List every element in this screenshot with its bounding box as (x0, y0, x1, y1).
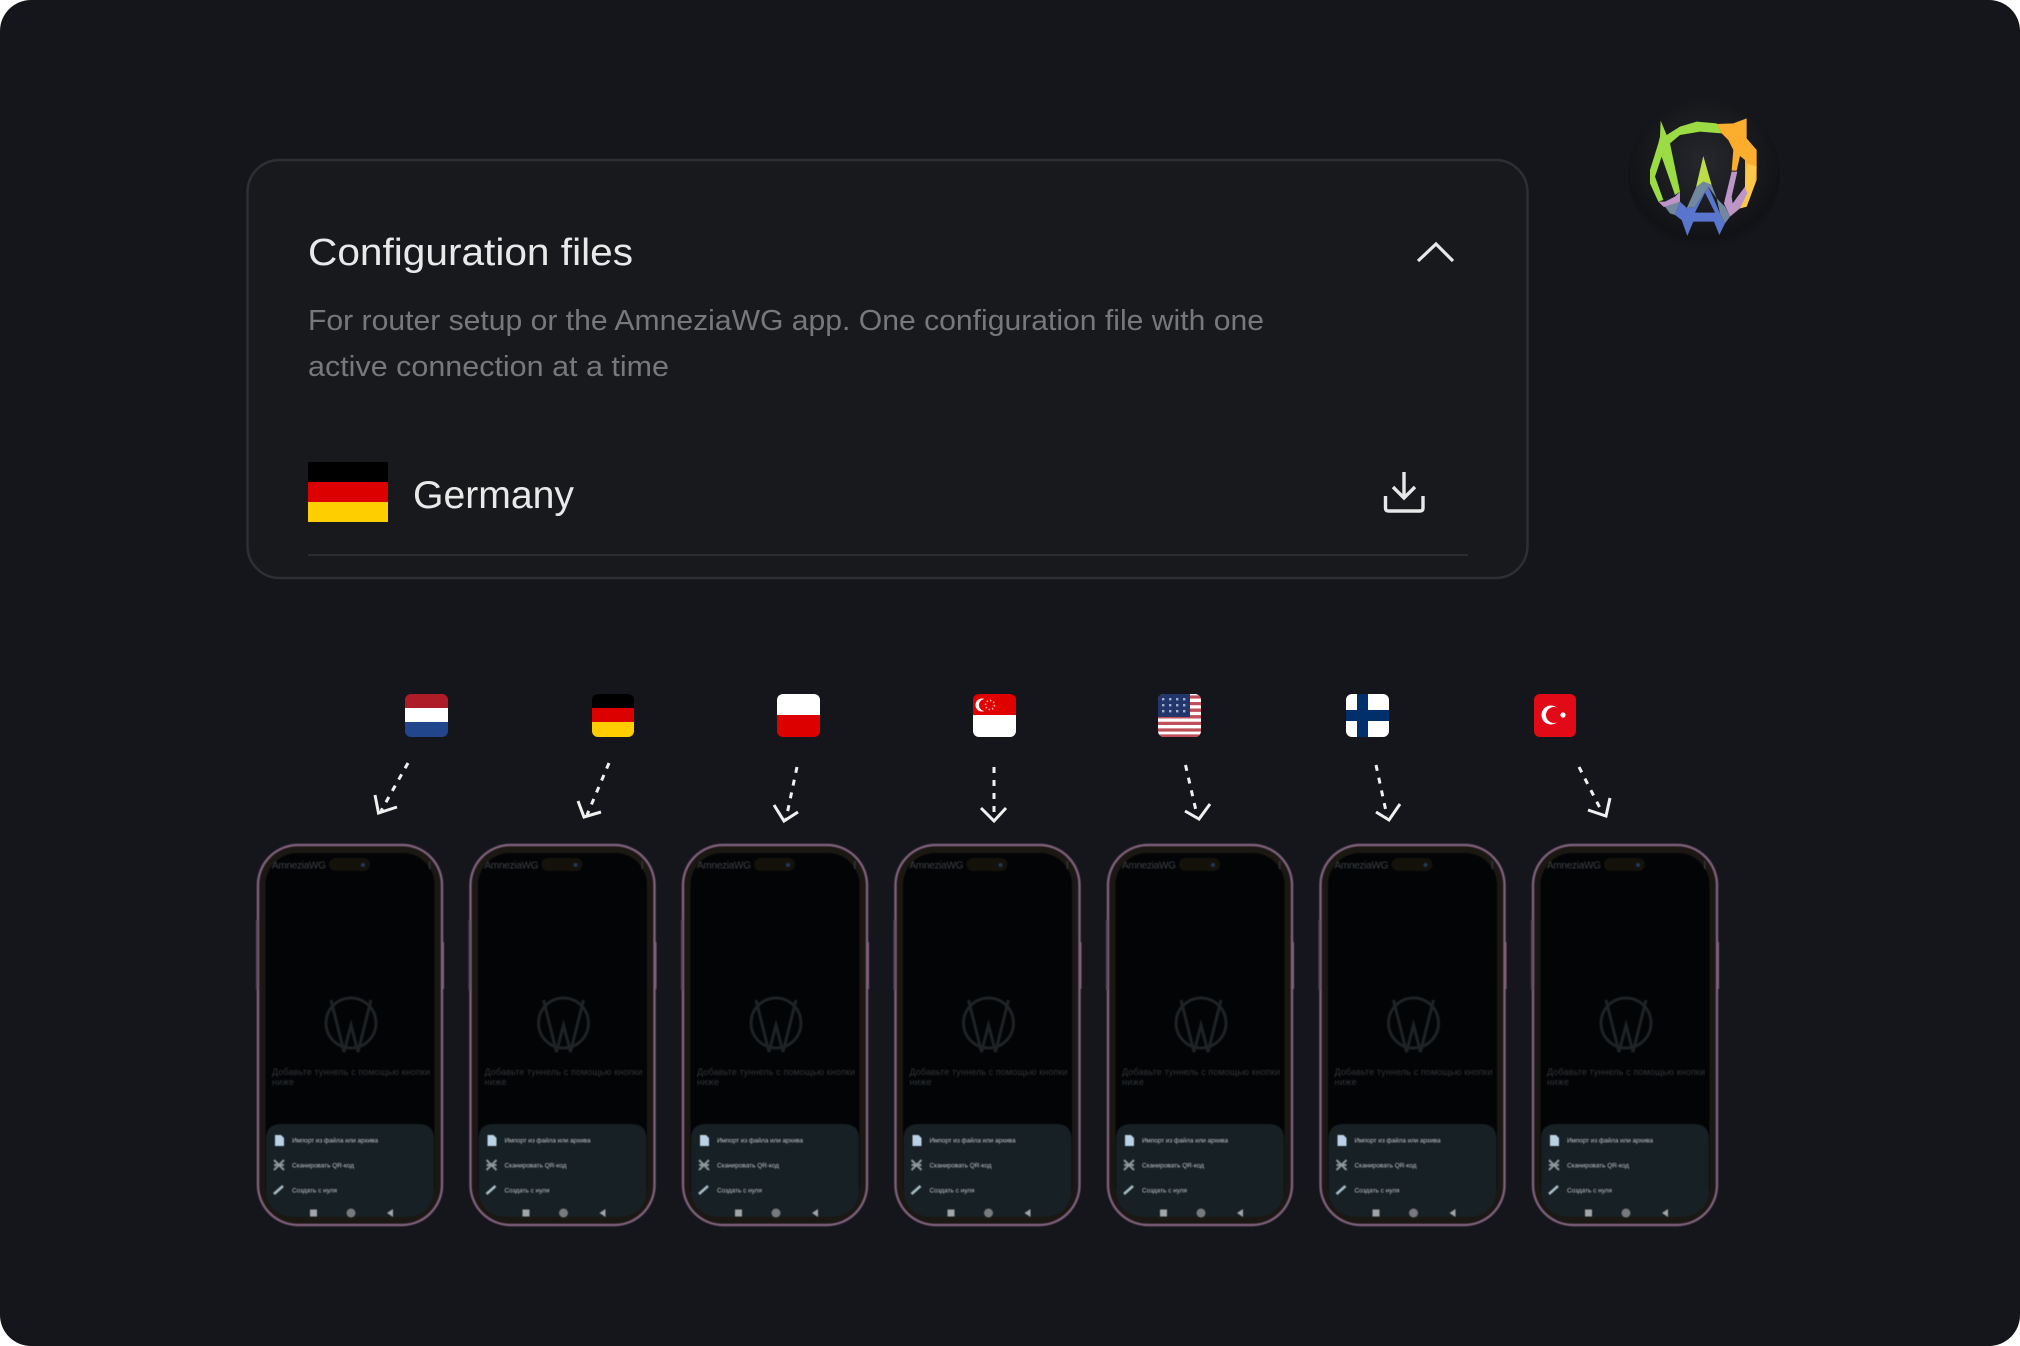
logo: AmneziaWG (1628, 98, 1780, 250)
flag tile: Finland (1346, 694, 1389, 737)
arrow: Germany to phone 2 (578, 763, 609, 817)
phone 4: Импорт из файла или архива (930, 1136, 1016, 1144)
phone 1: Импорт из файла или архива (292, 1136, 378, 1144)
phone 6: Сканировать QR-код (1354, 1162, 1417, 1170)
flag tile: Turkey (1534, 694, 1576, 737)
icon: collapse chevron (1418, 244, 1453, 261)
phone 4: AmneziaWG (910, 860, 964, 872)
phone 5 (1106, 845, 1294, 1225)
phone 3 (681, 845, 869, 1225)
phone 3: Сканировать QR-код (717, 1162, 779, 1170)
phone 3: AmneziaWG (697, 860, 751, 872)
description text (308, 305, 1264, 383)
phone 2 (468, 845, 656, 1225)
flag tile: Netherlands (405, 694, 448, 737)
phone 6: Создать с нуля (1354, 1188, 1400, 1194)
phone 5: AmneziaWG (1122, 860, 1176, 872)
phone 5: Добавьте туннель с помощью кнопки (1122, 1067, 1280, 1077)
phone 2: Добавьте туннель с помощью кнопки (484, 1067, 642, 1077)
phone 1: Создать с нуля (292, 1188, 338, 1194)
arrow: Finland to phone 6 (1376, 765, 1400, 820)
description text: For router setup or the AmneziaWG app. One configuration file with one (308, 305, 1264, 337)
phone 2: AmneziaWG (484, 860, 539, 872)
arrow: Netherlands to phone 1 (375, 763, 408, 813)
phone 6: Добавьте туннель с помощью кнопки (1334, 1067, 1492, 1077)
phone 4: Добавьте туннель с помощью кнопки (910, 1067, 1068, 1077)
label: Germany: Germany (413, 474, 574, 517)
phone 1 (256, 845, 444, 1225)
phone 2: ниже (484, 1077, 506, 1087)
phone 2: Импорт из файла или архива (504, 1136, 591, 1144)
phone 1: Сканировать QR-код (292, 1162, 354, 1170)
phone 5: Импорт из файла или архива (1142, 1136, 1228, 1144)
phone 5: Сканировать QR-код (1142, 1162, 1204, 1170)
arrow: United States to phone 5 (1185, 765, 1210, 819)
phone 3: ниже (697, 1077, 719, 1087)
phone 3: Создать с нуля (717, 1188, 763, 1194)
phone 4: Сканировать QR-код (930, 1162, 992, 1170)
arrow: Turkey to phone 7 (1579, 767, 1610, 816)
phone 7: AmneziaWG (1547, 860, 1601, 872)
phone 7: Импорт из файла или архива (1567, 1136, 1653, 1144)
phone 7: Сканировать QR-код (1567, 1162, 1629, 1170)
flag tile: Germany (592, 694, 634, 737)
flag: Germany (308, 462, 388, 522)
phone 6 (1318, 845, 1506, 1225)
phone 4: ниже (910, 1077, 932, 1087)
phone 6: AmneziaWG (1334, 860, 1389, 872)
phone 7: Добавьте туннель с помощью кнопки (1547, 1067, 1705, 1077)
arrow: Singapore to phone 4 (981, 767, 1006, 821)
flag tile: United States (1158, 694, 1201, 737)
phone 7: ниже (1547, 1077, 1569, 1087)
phone 5: ниже (1122, 1077, 1144, 1087)
phone 7: Создать с нуля (1567, 1188, 1613, 1194)
phone 1: ниже (272, 1077, 294, 1087)
phone 2: Сканировать QR-код (504, 1162, 567, 1170)
phone 1: Добавьте туннель с помощью кнопки (272, 1067, 430, 1077)
phone 4: Создать с нуля (930, 1188, 975, 1194)
phone 4 (894, 845, 1082, 1225)
phone 2: Создать с нуля (504, 1188, 550, 1194)
phone 7 (1531, 845, 1719, 1225)
arrow: Poland to phone 3 (774, 767, 798, 821)
phone 5: Создать с нуля (1142, 1188, 1188, 1194)
phone 3: Добавьте туннель с помощью кнопки (697, 1067, 855, 1077)
heading: configuration files: Configuration files (308, 232, 633, 274)
phone 6: ниже (1334, 1077, 1356, 1087)
phone 3: Импорт из файла или архива (717, 1136, 803, 1144)
phone 6: Импорт из файла или архива (1354, 1136, 1441, 1144)
panel: configuration files (248, 160, 1528, 578)
flag tile: Poland (777, 694, 820, 737)
phone 1: AmneziaWG (272, 860, 326, 872)
icon: download (1386, 472, 1423, 511)
flag tile: Singapore (973, 694, 1016, 737)
description text: active connection at a time (308, 351, 669, 383)
